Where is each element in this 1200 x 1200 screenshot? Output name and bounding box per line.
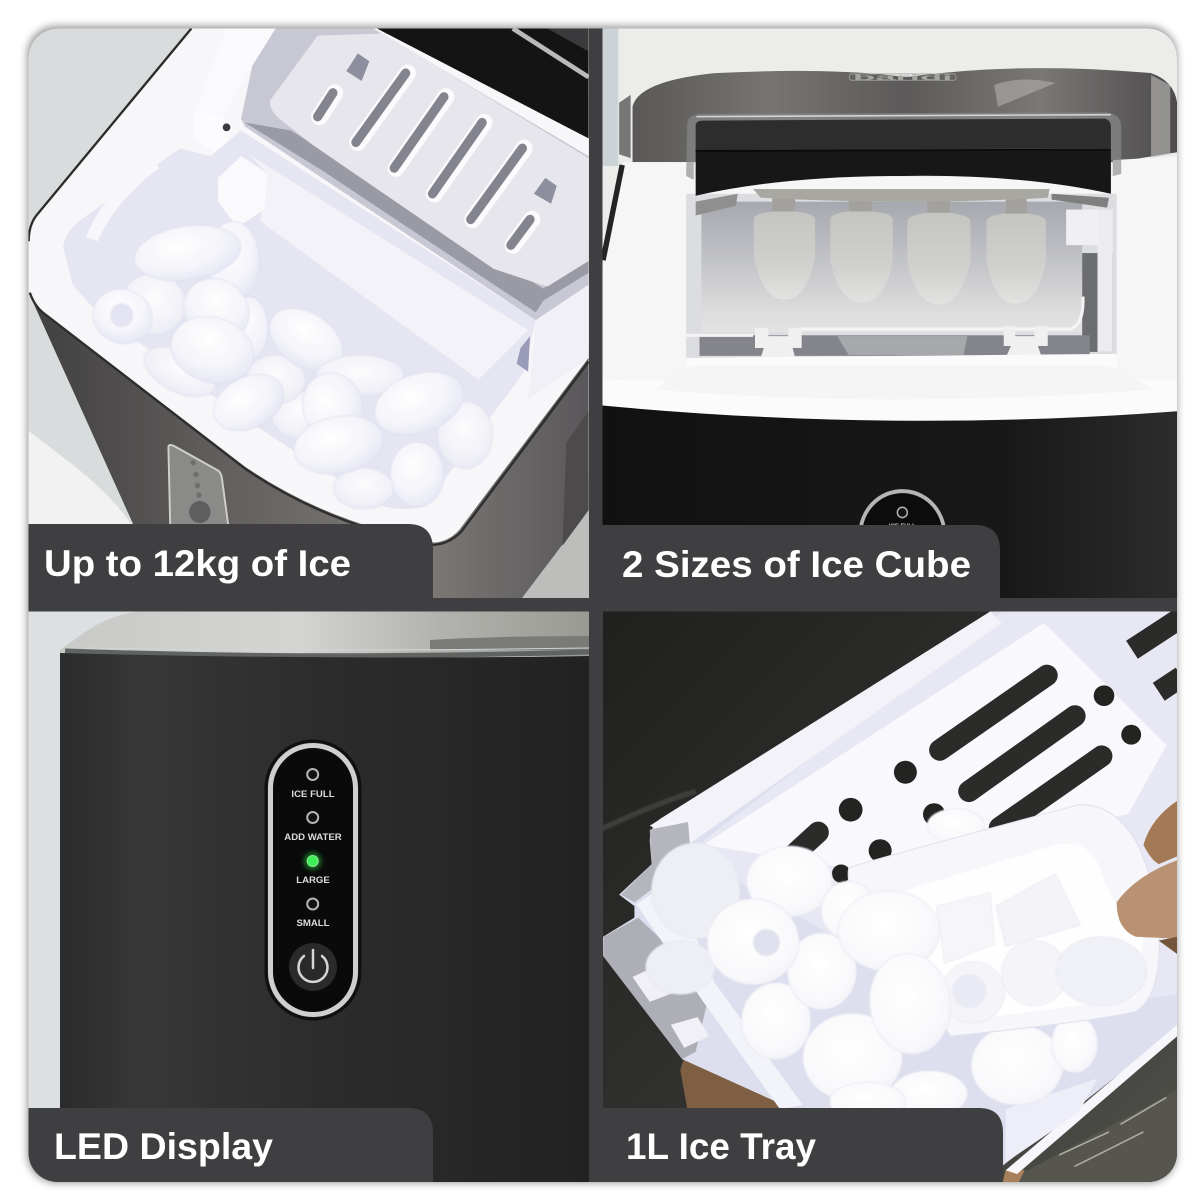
tray slots and holes <box>788 617 1182 860</box>
brand logo <box>849 74 956 81</box>
black lid hinge <box>377 28 589 138</box>
indicator: large (lit green) <box>296 852 330 886</box>
indicator: ice full <box>291 769 335 800</box>
label tab: up to 12kg of ice <box>28 524 433 598</box>
icon: power button <box>289 943 337 991</box>
scoop <box>848 805 1160 1036</box>
label tab: led display: LED Display <box>54 1126 273 1167</box>
panel: 1l ice tray <box>600 600 1200 1200</box>
white machine frame <box>602 156 1177 381</box>
led control panel <box>266 741 360 1019</box>
control panel top: ICE FULL <box>889 524 916 530</box>
control panel on the side <box>168 445 229 530</box>
label tab: 2 sizes of ice cube <box>602 525 1000 611</box>
machine body <box>60 653 589 1184</box>
fingers at right <box>1117 801 1177 954</box>
ice bin interior <box>63 130 536 509</box>
stray white tray corner <box>29 431 132 526</box>
indicator: add water: ADD WATER <box>284 832 342 843</box>
white front ledge <box>600 354 1177 421</box>
black handle <box>686 112 1121 196</box>
machine body <box>29 293 589 605</box>
ice chamber window <box>686 194 1117 360</box>
indicator: small <box>296 898 330 929</box>
ice cubes <box>87 219 493 509</box>
hanging ice fingers <box>754 196 1046 304</box>
glass lid <box>60 611 589 656</box>
label tab: led display <box>28 1108 433 1184</box>
ice cubes over scoop <box>821 881 957 1059</box>
indicator: add water <box>284 812 342 843</box>
hand at lower left <box>680 1060 779 1108</box>
label tab: 1l ice tray <box>602 1108 1003 1184</box>
label tab: up to 12kg of ice: Up to 12kg of Ice <box>44 543 351 584</box>
panel: up to 12kg of ice <box>28 28 589 598</box>
label tab: 1l ice tray: 1L Ice Tray <box>626 1126 816 1167</box>
ice cubes in tray <box>646 809 1098 1120</box>
tray <box>603 611 1182 1189</box>
panel: 2 sizes of ice cube <box>602 28 1177 598</box>
black body <box>602 406 1177 598</box>
white rim <box>29 28 589 542</box>
tray with slots <box>270 34 589 287</box>
upper recess <box>241 28 589 320</box>
brand logo: baridi <box>853 73 952 82</box>
indicator: small: SMALL <box>296 918 330 929</box>
label tab: 2 sizes of ice cube: 2 Sizes of Ice Cube <box>622 544 971 585</box>
transparent lid <box>633 68 1177 162</box>
indicator: large (lit green): LARGE <box>296 875 330 886</box>
evaporator foam strip <box>753 189 1050 202</box>
panel: led display <box>28 611 589 1184</box>
indicator: ice full: ICE FULL <box>291 789 335 800</box>
control panel top <box>859 489 946 525</box>
